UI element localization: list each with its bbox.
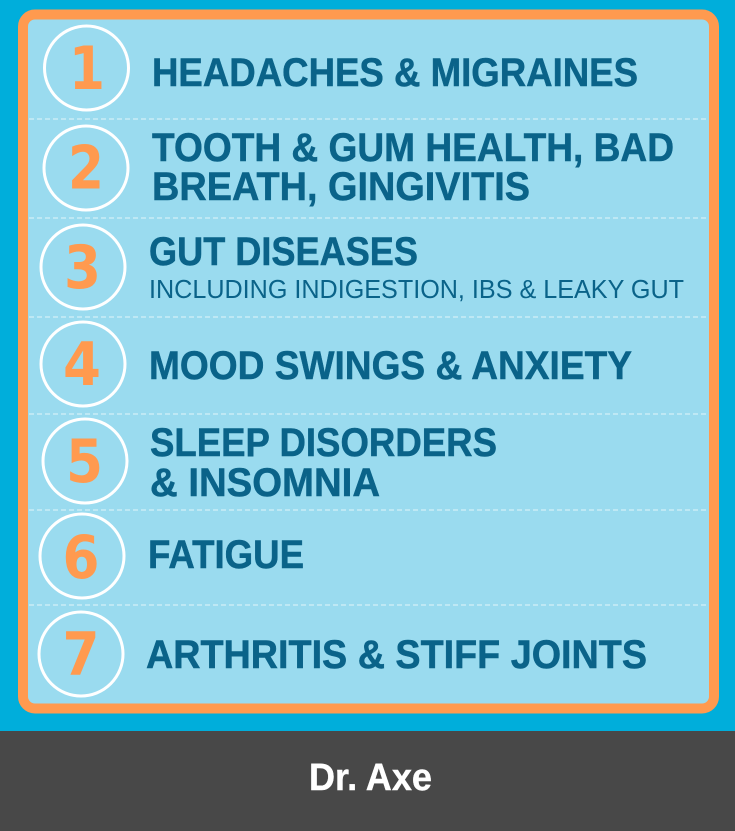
item 1: headaches [44, 26, 638, 110]
item 5: sleep disorders: 5 [66, 427, 103, 497]
item 6: fatigue: 6 [62, 523, 100, 593]
item 5: sleep disorders: & INSOMNIA [150, 461, 380, 505]
item 7: arthritis: 7 [62, 620, 100, 690]
panel: orange-framed list [23, 14, 714, 708]
item 3: gut diseases: INCLUDING INDIGESTION, IBS & LEAKY GUT [149, 274, 684, 304]
item 2: tooth and gum health [44, 126, 674, 210]
footer brand: Dr. Axe [309, 757, 432, 799]
item 2: tooth and gum health: TOOTH & GUM HEALTH, BAD [152, 126, 674, 170]
item 4: mood swings: MOOD SWINGS & ANXIETY [149, 344, 632, 388]
item 6: fatigue [40, 514, 304, 598]
item 1: headaches: 1 [69, 34, 105, 104]
item 3: gut diseases [41, 225, 684, 309]
item 1: headaches: HEADACHES & MIGRAINES [152, 51, 638, 95]
item 7: arthritis [39, 612, 647, 696]
item 3: gut diseases: GUT DISEASES [149, 230, 418, 274]
item 6: fatigue: FATIGUE [148, 533, 304, 577]
item 3: gut diseases: 3 [64, 233, 101, 303]
item 7: arthritis: ARTHRITIS & STIFF JOINTS [146, 633, 647, 677]
item 2: tooth and gum health: BREATH, GINGIVITIS [152, 165, 530, 209]
item 5: sleep disorders [43, 419, 497, 505]
footer band [0, 731, 735, 831]
item 2: tooth and gum health: 2 [68, 134, 104, 204]
item 5: sleep disorders: SLEEP DISORDERS [150, 421, 497, 465]
item 4: mood swings: 4 [63, 330, 101, 400]
item 4: mood swings [41, 322, 632, 406]
